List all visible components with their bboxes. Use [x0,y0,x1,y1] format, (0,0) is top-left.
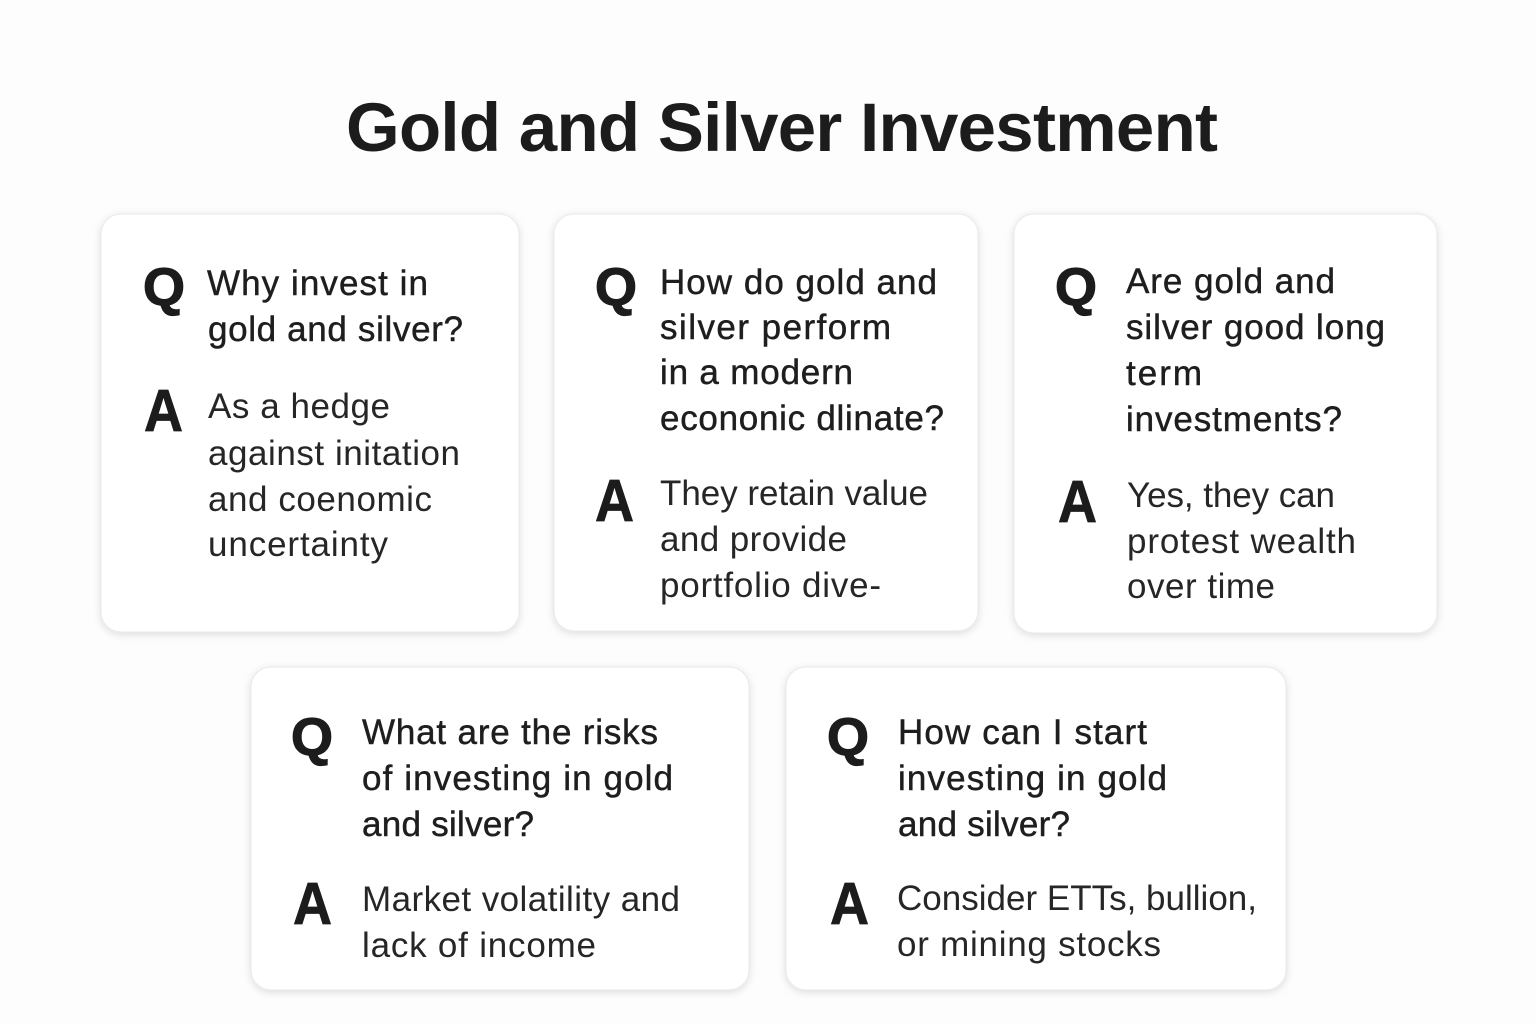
question text: Are gold and [1126,262,1335,301]
panel: why invest [101,214,519,632]
question text [660,263,944,438]
answer text [660,474,928,605]
icon: Q letter: Q [827,708,869,767]
question text [898,713,1167,844]
answer text: portfolio dive- [660,566,881,605]
panel: how to start [786,667,1286,990]
answer text: or mining stocks [897,925,1161,964]
answer text: over time [1127,567,1275,606]
icon: A letter: A [830,871,869,937]
icon: Q letter: Q [143,258,185,317]
question text: silver good long [1126,308,1385,347]
answer text: protest wealth [1127,522,1356,561]
answer text: and provide [660,520,847,559]
answer text: They retain value [660,474,928,513]
question text: Why invest in [207,264,428,303]
panel: risks [251,667,749,990]
question text: in a modern [660,353,853,392]
question text [207,264,463,349]
question text: What are the risks [362,713,658,752]
icon: A letter: A [144,378,183,444]
question text: silver perform [660,308,891,347]
icon: Q letter: Q [1055,258,1097,317]
question text: and silver? [362,805,534,844]
answer text: Market volatility and [362,880,680,919]
answer text: and coenomic [208,480,432,519]
question text [362,713,673,844]
answer text [897,879,1257,964]
answer text: As a hedge [208,387,390,426]
answer text [1127,476,1356,606]
question text: How do gold and [660,263,937,302]
answer text: lack of income [362,926,596,965]
answer text: against initation [208,434,460,473]
question text: and silver? [898,805,1070,844]
question text: gold and silver? [208,310,463,349]
icon: Q letter: Q [291,708,333,767]
icon: Q letter: Q [595,258,637,317]
icon: A letter: A [293,871,332,937]
question text [1126,262,1385,439]
panel: long term [1014,214,1437,633]
answer text [362,880,680,965]
icon: A letter: A [595,468,634,534]
title: Gold and Silver Investment [346,89,1218,166]
answer text: uncertainty [208,525,388,564]
panel: modern performance [554,214,978,631]
question text: term [1126,354,1202,393]
question text: econonic dlinate? [660,399,944,438]
answer text: Yes, they can [1127,476,1335,515]
question text: How can I start [898,713,1147,752]
question text: of investing in gold [362,759,673,798]
question text: investing in gold [898,759,1167,798]
answer text [208,387,460,564]
icon: A letter: A [1058,469,1097,535]
answer text: Consider ETTs, bullion, [897,879,1257,918]
question text: investments? [1126,400,1342,439]
